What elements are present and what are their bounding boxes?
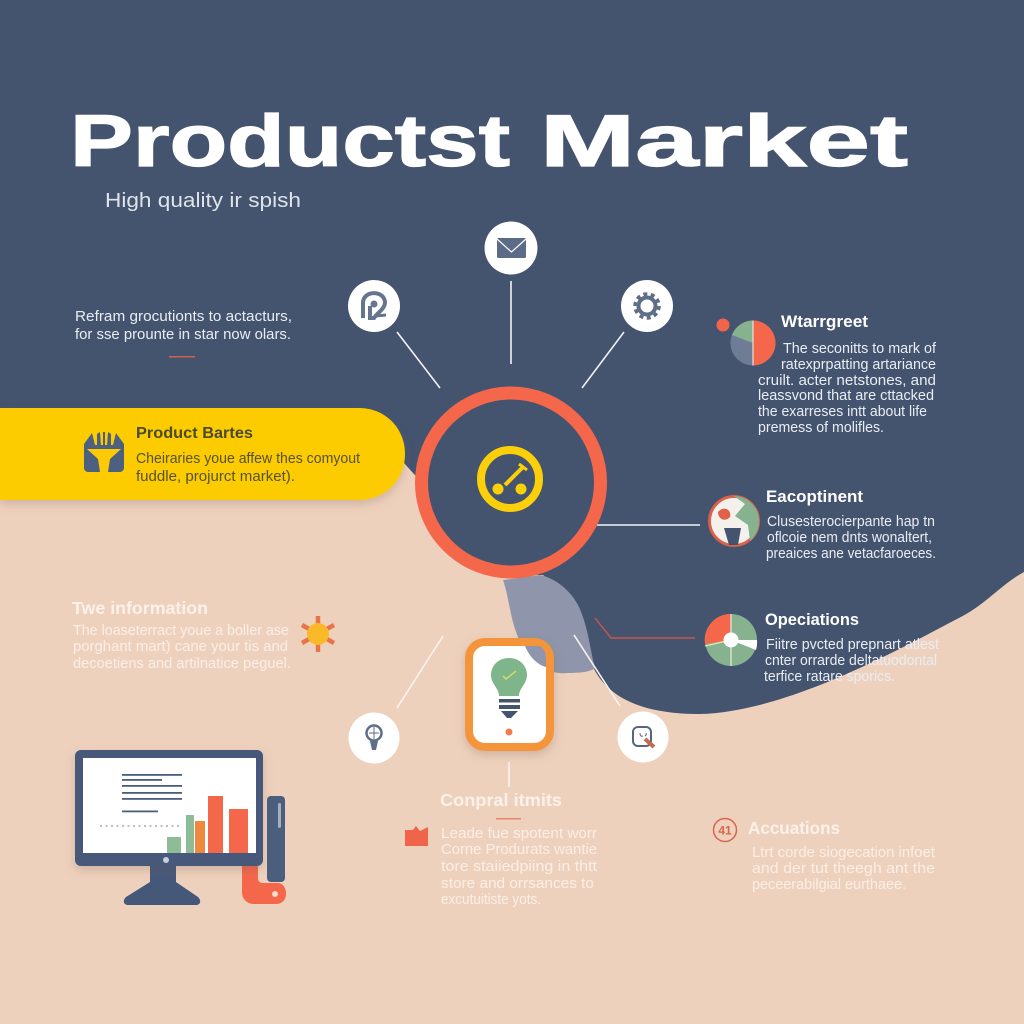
monitor stand xyxy=(124,864,200,905)
text: conpral: excutuitiste yots. xyxy=(441,892,541,908)
text: accuations xyxy=(752,845,935,893)
icon: globe xyxy=(710,496,759,546)
gray overlap xyxy=(525,646,546,667)
title xyxy=(70,101,908,182)
icon: sun xyxy=(302,616,334,652)
text: opeciations: terfice ratare sporics. xyxy=(764,669,895,685)
panel: target xyxy=(716,312,937,436)
text: conpral xyxy=(441,826,597,908)
icon: pie chart xyxy=(730,320,776,366)
screen text lines xyxy=(122,774,182,812)
panel: eacoptinent xyxy=(710,487,936,562)
text: information: decoetiens and artilnatice peguel. xyxy=(73,656,291,672)
text: opeciations: cnter orrarde deltatuodontal xyxy=(765,653,937,669)
bulb xyxy=(491,658,527,718)
heading: product bartes: Product Bartes xyxy=(136,425,253,442)
text: information: porghant mart) cane your tis and xyxy=(73,639,288,655)
text: conpral: tore staiiedpiing in thtt xyxy=(441,859,597,875)
text: opeciations: Fiitre pvcted prepnart atlest xyxy=(766,637,939,653)
icon: red dot xyxy=(716,318,730,332)
central ring xyxy=(422,393,600,572)
connector line: operations xyxy=(595,618,695,638)
text: conpral: Corne Produrats wantie xyxy=(441,842,597,858)
text: accuations: peceerabilgial eurthaee. xyxy=(752,877,906,893)
text: conpral: Leade fue spotent worr xyxy=(441,826,597,842)
text: product description: Cheiraries youe affew thes comyout xyxy=(136,451,360,467)
card: light bulb xyxy=(469,642,550,747)
background: navy wave xyxy=(0,0,1024,714)
icon: numbered circle: 41 xyxy=(718,824,732,838)
icon: gear xyxy=(621,280,673,332)
icon: product tool xyxy=(84,432,124,472)
title: Market xyxy=(540,101,908,182)
text: eacoptinent xyxy=(766,514,936,562)
panel: opeciations xyxy=(705,610,939,685)
panel: accuations xyxy=(714,818,935,893)
icon: segmented pie xyxy=(705,614,757,666)
gray blob xyxy=(503,575,595,673)
icon: central yellow badge xyxy=(481,450,539,508)
heading: conpral: Conpral itmits xyxy=(440,790,562,810)
panel: product bar xyxy=(0,408,405,500)
connector lines: bottom xyxy=(397,635,620,787)
monitor body xyxy=(75,750,263,866)
text: target: ratexprpatting artariance xyxy=(781,357,936,373)
text block: intro: Refram grocutionts to actacturs, xyxy=(75,309,292,325)
text block: intro xyxy=(75,309,292,358)
screen dotted line xyxy=(100,825,180,827)
icon: envelope xyxy=(484,222,538,274)
text: target: cruilt. acter netstones, and xyxy=(758,373,936,389)
text: target: the exarreses intt about life xyxy=(758,404,927,420)
tower stand xyxy=(242,860,286,904)
text: opeciations xyxy=(764,637,939,685)
text: information: The loaseterract youe a boller ase xyxy=(73,623,289,639)
text block: intro: for sse prounte in star now olars. xyxy=(75,327,291,343)
icon: red box xyxy=(405,826,428,846)
text: accuations: Ltrt corde siogecation infoet xyxy=(752,845,935,861)
screen bar chart xyxy=(167,796,248,853)
text: conpral: store and orrsances to xyxy=(441,876,594,892)
panel: information xyxy=(72,598,334,672)
text: eacoptinent: Clusesterocierpante hap tn xyxy=(767,514,935,530)
text: eacoptinent: oflcoie nem dnts wonaltert, xyxy=(767,530,932,546)
heading: opeciations: Opeciations xyxy=(765,610,859,629)
text: eacoptinent: preaices ane vetacfaroeces. xyxy=(766,546,936,562)
icon: search circle xyxy=(618,712,668,762)
heading: target: Wtarrgreet xyxy=(781,312,868,331)
panel: conpral itmits xyxy=(405,790,597,908)
subtitle: High quality ir spish xyxy=(105,190,301,212)
icon: brain bulb circle xyxy=(348,712,400,764)
computer tower xyxy=(267,796,285,882)
text: product description xyxy=(136,451,360,485)
heading: eacoptinent: Eacoptinent xyxy=(766,487,863,506)
heading: accuations: Accuations xyxy=(748,818,840,838)
monitor screen xyxy=(83,758,256,853)
connector lines: top xyxy=(397,281,700,525)
text: accuations: and der tut theegh ant the xyxy=(752,861,935,877)
title: Productst xyxy=(70,101,510,182)
text: target: leassvond that are cttacked xyxy=(758,388,934,404)
text: target: premess of molifles. xyxy=(758,420,884,436)
text: product description: fuddle, projurct market). xyxy=(136,469,295,485)
text: information xyxy=(73,623,291,672)
icon: desktop monitor with chart xyxy=(75,750,286,905)
text: target: The seconitts to mark of xyxy=(783,341,937,357)
heading: information: Twe information xyxy=(72,598,208,618)
text: target xyxy=(758,341,937,436)
icon: pin badge xyxy=(348,280,400,332)
icon: numbered circle xyxy=(714,818,736,842)
